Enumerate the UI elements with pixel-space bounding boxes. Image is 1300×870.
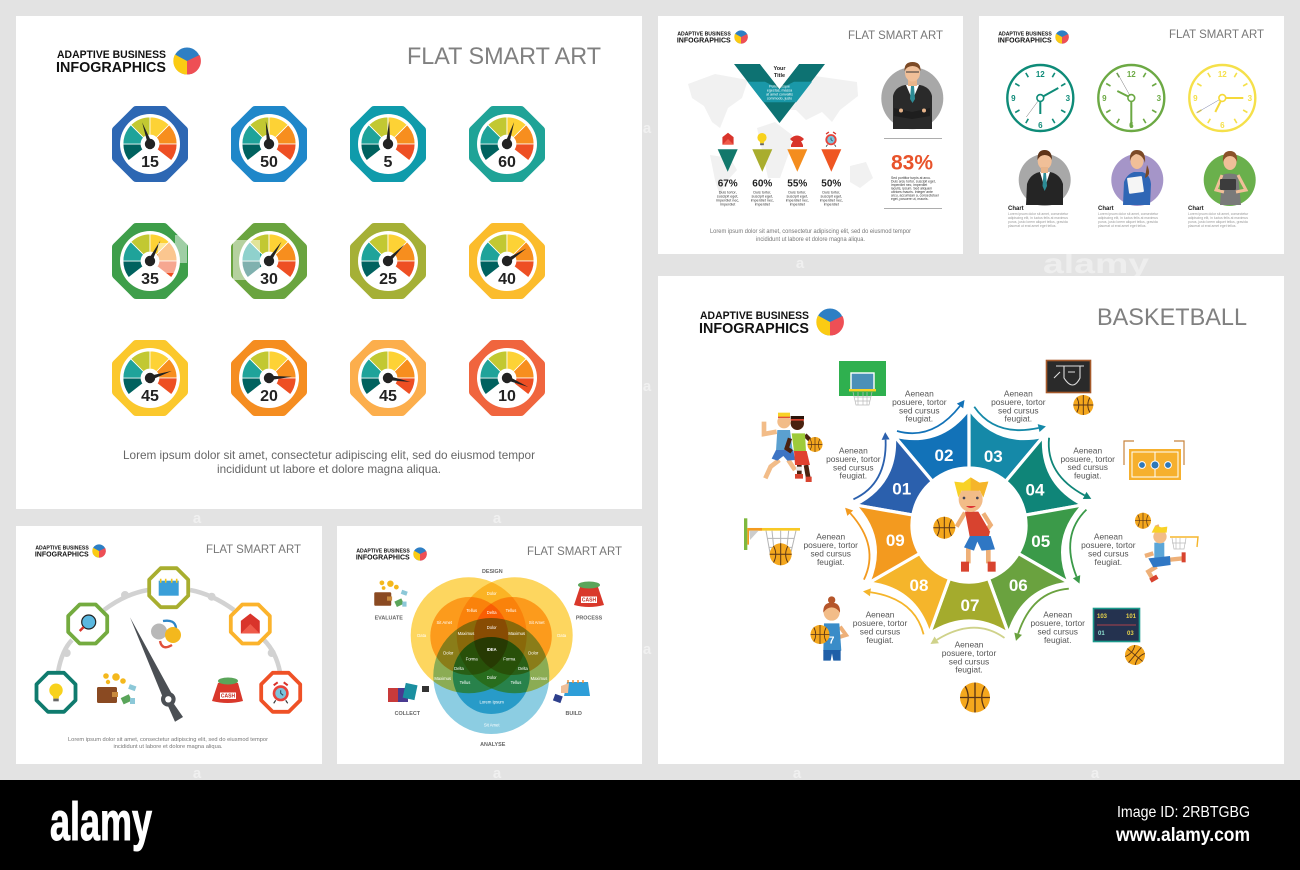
venn inner labels: IDEA bbox=[487, 647, 497, 652]
big percent description: imperdiet nec, imperdiet bbox=[891, 183, 927, 187]
segment numbers: 08 bbox=[910, 576, 928, 595]
footer image id: Image ID: 2RBTGBG bbox=[1117, 804, 1250, 821]
icon: cash bag bbox=[212, 678, 243, 703]
label 02: Aenean bbox=[905, 388, 934, 398]
label 03: posuere, tortor bbox=[991, 397, 1046, 407]
venn inner labels: Lorem Ipsum bbox=[479, 700, 504, 704]
ball in net bbox=[770, 543, 792, 565]
venn inner labels: Delta bbox=[454, 666, 465, 671]
centre ball bbox=[933, 517, 955, 539]
logo: percentages panel: ADAPTIVE BUSINESS bbox=[677, 32, 731, 38]
panel: percentages on world map bbox=[658, 16, 963, 254]
label 06: sed cursus bbox=[1037, 626, 1078, 636]
gauge 5: 5 bbox=[384, 154, 393, 171]
venn inner labels: Dolor bbox=[443, 650, 454, 656]
label 01: Aenean bbox=[839, 446, 868, 456]
icon: scoreboard: 103 bbox=[1097, 614, 1108, 620]
label 08: Aenean bbox=[866, 610, 895, 620]
logo: gauges panel: ADAPTIVE BUSINESS bbox=[57, 49, 166, 61]
icon: folders bbox=[388, 683, 429, 702]
label 05: posuere, tortor bbox=[1081, 540, 1136, 550]
icon: stopwatch bbox=[825, 132, 837, 147]
icon: court bbox=[1124, 441, 1184, 479]
chart text 1: placerat ut erat amet eget tellus. bbox=[1008, 224, 1056, 228]
watermark marks in gutters: a bbox=[493, 765, 502, 782]
watermark marks in gutters: a bbox=[193, 510, 202, 527]
logo: venn panel bbox=[356, 547, 427, 561]
node: alarm clock bbox=[261, 673, 300, 712]
clock green teal: 9 bbox=[1011, 94, 1016, 103]
player: girl with ball bbox=[823, 596, 846, 661]
icon: cash bag: CASH bbox=[221, 694, 235, 700]
icon: telephone bbox=[790, 136, 804, 147]
panel: basketball wheel bbox=[658, 276, 1284, 764]
label 04: Aenean bbox=[1073, 445, 1102, 455]
label 09 bbox=[803, 532, 858, 567]
segment numbers: 05 bbox=[1031, 532, 1050, 551]
panel: clocks bbox=[979, 16, 1284, 254]
divider top bbox=[884, 137, 942, 140]
logo: venn panel: ADAPTIVE BUSINESS bbox=[356, 549, 410, 555]
gauge 10 bbox=[473, 344, 541, 412]
icon: calendar and hand bbox=[553, 680, 590, 703]
venn inner labels: Data bbox=[557, 633, 567, 638]
watermark marks in gutters: a bbox=[193, 765, 202, 782]
logo: percentages panel: INFOGRAPHICS bbox=[677, 35, 731, 44]
big percent description bbox=[891, 176, 940, 201]
centre player bbox=[954, 477, 996, 572]
logo: arc panel: ADAPTIVE BUSINESS bbox=[35, 546, 89, 552]
player: jump shot bbox=[1145, 525, 1186, 583]
chart text 1 bbox=[1008, 206, 1069, 228]
label 07: feugiat. bbox=[955, 665, 983, 675]
label 01: feugiat. bbox=[840, 471, 867, 481]
chart text 3: purus, justo lorem aliquet tellus, gravida bbox=[1188, 220, 1248, 224]
label 05: Aenean bbox=[1094, 532, 1123, 542]
clock green teal bbox=[1007, 65, 1073, 131]
label 08: posuere, tortor bbox=[853, 618, 907, 628]
logo: clocks panel: ADAPTIVE BUSINESS bbox=[998, 32, 1052, 38]
title triangle: Your bbox=[773, 66, 786, 72]
percent descriptions: imperdiet nec, bbox=[786, 198, 809, 202]
chart text 3: Chart bbox=[1188, 206, 1204, 212]
panel: arc with needle bbox=[16, 526, 322, 764]
chart text 2: Lorem ipsum dolor sit amet, consectetur bbox=[1098, 212, 1159, 216]
venn inner labels: Sit Amet bbox=[484, 722, 500, 728]
label 09: posuere, tortor bbox=[803, 540, 858, 550]
big percent description: arcu, accumsan a, consectetuer bbox=[891, 194, 940, 198]
segment numbers bbox=[886, 446, 1050, 615]
label 03: feugiat. bbox=[1005, 414, 1032, 424]
venn outer labels: PROCESS bbox=[576, 616, 603, 622]
ball under label 07 bbox=[960, 682, 990, 712]
gray arc bbox=[58, 590, 280, 672]
panel: gauges bbox=[16, 16, 642, 509]
watermark in gutter: alamy bbox=[1043, 248, 1150, 279]
watermark marks in gutters: a bbox=[1091, 765, 1100, 782]
gauge 50 bbox=[235, 110, 303, 178]
chart text 2 bbox=[1098, 206, 1159, 228]
logo: clocks panel: INFOGRAPHICS bbox=[998, 35, 1052, 44]
gauge 40 bbox=[473, 227, 541, 295]
logo: basketball panel bbox=[699, 308, 844, 337]
clock yellow: 9 bbox=[1193, 94, 1198, 103]
caption: percentages panel bbox=[710, 228, 911, 243]
venn inner labels: Forma bbox=[466, 656, 478, 662]
arrows bbox=[833, 383, 1113, 667]
venn inner labels: Delta bbox=[487, 610, 497, 615]
gauge 30 bbox=[235, 227, 303, 295]
segments bbox=[837, 388, 1107, 660]
triangle 67 bbox=[718, 149, 738, 172]
gauge 20 bbox=[235, 344, 303, 412]
caption: gauges panel: incididunt ut labore et dolore magna aliqua. bbox=[217, 462, 441, 476]
label 01 bbox=[826, 446, 881, 481]
venn outer labels: EVALUATE bbox=[375, 616, 403, 622]
big percent description: Duis arcu tortor, suscipit eget, bbox=[891, 180, 936, 184]
percent descriptions: suscipit eget, bbox=[717, 194, 738, 198]
label 04 bbox=[1060, 445, 1115, 480]
node: magnifier bbox=[68, 604, 107, 644]
watermark marks in gutters bbox=[193, 120, 1100, 782]
percent descriptions: imperdiet bbox=[790, 202, 805, 206]
gauge 30: 30 bbox=[260, 271, 278, 288]
clock yellow: 12 bbox=[1218, 70, 1227, 79]
logo: gauges panel bbox=[56, 48, 201, 76]
label 01: posuere, tortor bbox=[826, 454, 881, 464]
label 03: sed cursus bbox=[998, 405, 1039, 415]
big percent: 83% bbox=[891, 152, 933, 174]
venn outer labels: DESIGN bbox=[482, 569, 503, 575]
needle bbox=[130, 617, 183, 722]
ball: defenders bbox=[808, 437, 822, 452]
label 04: sed cursus bbox=[1067, 462, 1108, 472]
clock yellow bbox=[1189, 65, 1255, 131]
portrait: businessman bbox=[881, 62, 943, 129]
venn inner labels: Maximus bbox=[458, 631, 474, 636]
venn inner labels: Tellus bbox=[506, 608, 516, 613]
chart text 2: Chart bbox=[1098, 206, 1114, 212]
chart text 3: adipiscing elit, in luctus felis at maximus bbox=[1188, 216, 1248, 220]
big percent description: iaculis, ipsum. Sed aliquam bbox=[891, 186, 932, 190]
label 08: sed cursus bbox=[860, 626, 900, 636]
label 04: feugiat. bbox=[1074, 470, 1101, 480]
portrait: man bbox=[1019, 150, 1071, 206]
clock green: 9 bbox=[1102, 94, 1107, 103]
heading: arc panel: FLAT SMART ART bbox=[206, 542, 302, 556]
clock green: 12 bbox=[1127, 70, 1136, 79]
venn outer labels: ANALYSE bbox=[480, 742, 506, 748]
big percent description: eget, posuere ut, mauris. bbox=[891, 197, 929, 201]
clock yellow: 6 bbox=[1220, 121, 1225, 130]
heading: clocks panel: FLAT SMART ART bbox=[1169, 27, 1265, 41]
footer band bbox=[0, 780, 1300, 870]
venn outer labels: COLLECT bbox=[395, 711, 421, 717]
logo: basketball panel: INFOGRAPHICS bbox=[699, 320, 809, 337]
wheel bbox=[833, 383, 1113, 667]
caption: gauges panel: Lorem ipsum dolor sit amet, consectetur adipiscing elit, sed do eiusmod tempor bbox=[123, 448, 535, 462]
chart text 1: Chart bbox=[1008, 206, 1024, 212]
big percent description: Sed porttitor turpis at arcu. bbox=[891, 176, 931, 180]
venn inner labels: Dolor bbox=[487, 625, 497, 630]
title triangle: egestas, massa bbox=[767, 88, 792, 92]
icon: chalkboard bbox=[1046, 360, 1090, 392]
panel: venn diagram bbox=[337, 526, 642, 764]
venn inner labels: Sit Amet bbox=[437, 620, 453, 625]
watermark marks in gutters: a bbox=[643, 641, 652, 658]
percent values: 55% bbox=[787, 178, 807, 190]
label 07: Aenean bbox=[955, 640, 984, 650]
ball: jump shot bbox=[1135, 513, 1151, 529]
title triangle: at amet convallis bbox=[766, 93, 793, 97]
heading: venn panel: FLAT SMART ART bbox=[527, 544, 623, 558]
gauge 25: 25 bbox=[379, 271, 397, 288]
gauge 25 bbox=[354, 227, 422, 295]
label 02: sed cursus bbox=[899, 405, 940, 415]
percent values bbox=[718, 178, 841, 190]
icon: wallet bbox=[374, 580, 408, 607]
watermark marks in gutters: a bbox=[643, 378, 652, 395]
logo: arc panel bbox=[35, 544, 106, 558]
venn inner labels bbox=[417, 591, 567, 728]
percent descriptions: imperdiet bbox=[720, 202, 735, 206]
node: bulb bbox=[36, 673, 76, 712]
percent descriptions: Duis tortor, bbox=[788, 190, 806, 194]
caption: gauges panel bbox=[123, 448, 535, 476]
logo: venn panel: INFOGRAPHICS bbox=[356, 552, 410, 561]
watermark marks in gutters: a bbox=[643, 120, 652, 137]
label 05 bbox=[1081, 532, 1136, 567]
venn inner labels: Tellus bbox=[466, 608, 477, 613]
venn inner labels: Dolor bbox=[528, 650, 539, 656]
portrait: woman with papers bbox=[1111, 150, 1163, 206]
chart text 3: Lorem ipsum dolor sit amet, consectetur bbox=[1188, 212, 1249, 216]
chart text 1: purus, justo lorem aliquet tellus, gravida bbox=[1008, 220, 1068, 224]
percent descriptions: imperdiet nec, bbox=[751, 198, 774, 202]
label 05: feugiat. bbox=[1095, 557, 1122, 567]
label 03: Aenean bbox=[1004, 388, 1033, 398]
triangle 50 bbox=[821, 149, 841, 172]
icon: scoreboard: 01 bbox=[1098, 631, 1105, 637]
caption: arc panel: Lorem ipsum dolor sit amet, consectetur adipiscing elit, sed do eiusmod tempor bbox=[68, 737, 268, 743]
ball under chalkboard bbox=[1073, 395, 1093, 415]
heading: basketball panel: BASKETBALL bbox=[1097, 304, 1247, 331]
label 06: Aenean bbox=[1043, 610, 1072, 620]
chart text 1: adipiscing elit, in luctus felis at maximus bbox=[1008, 216, 1068, 220]
gauge 10: 10 bbox=[498, 388, 516, 405]
icon: bulb bbox=[757, 133, 767, 145]
triangle 60 bbox=[752, 149, 772, 172]
segment numbers: 04 bbox=[1026, 480, 1045, 499]
gauge 50: 50 bbox=[260, 154, 278, 171]
logo: clocks panel bbox=[998, 30, 1069, 44]
player: girl with ball: 7 bbox=[829, 635, 835, 646]
gauge 35: 35 bbox=[141, 271, 159, 288]
title triangle: Title bbox=[774, 73, 785, 79]
icon: envelope bbox=[722, 133, 734, 145]
venn inner labels: Dolor bbox=[487, 675, 497, 680]
percent values: 67% bbox=[718, 178, 738, 190]
label 06: feugiat. bbox=[1044, 635, 1071, 645]
label 05: sed cursus bbox=[1088, 548, 1129, 558]
gauge 45 second: 45 bbox=[379, 388, 397, 405]
label 06: posuere, tortor bbox=[1030, 618, 1085, 628]
percent descriptions: suscipit eget, bbox=[787, 194, 808, 198]
node: calendar bbox=[149, 568, 188, 607]
venn outer labels: BUILD bbox=[565, 711, 582, 717]
ball: girl bbox=[810, 625, 830, 644]
venn inner labels: Delta bbox=[518, 666, 529, 671]
chart text 1: Lorem ipsum dolor sit amet, consectetur bbox=[1008, 212, 1069, 216]
segment numbers: 01 bbox=[892, 480, 911, 499]
caption: percentages panel: Lorem ipsum dolor sit amet, consectetur adipiscing elit, sed do eiusmod tempor bbox=[710, 228, 911, 235]
gauge 35 bbox=[116, 227, 184, 295]
gauge 45 bbox=[116, 344, 184, 412]
segment numbers: 09 bbox=[886, 531, 905, 550]
icon: small hoop bbox=[1170, 537, 1198, 549]
icon: cash bag bbox=[574, 582, 604, 607]
segment numbers: 03 bbox=[984, 447, 1003, 466]
label 03 bbox=[991, 388, 1046, 424]
caption: percentages panel: incididunt ut labore et dolore magna aliqua. bbox=[756, 236, 865, 243]
clock green teal: 6 bbox=[1038, 121, 1043, 130]
segment numbers: 07 bbox=[961, 596, 979, 615]
ball under scoreboard bbox=[1121, 641, 1149, 669]
label 09: feugiat. bbox=[817, 557, 844, 567]
icon: scoreboard bbox=[1094, 608, 1140, 642]
heading: gauges panel: FLAT SMART ART bbox=[407, 43, 601, 70]
percent descriptions: suscipit eget, bbox=[752, 194, 773, 198]
chart text 2: adipiscing elit, in luctus felis at maximus bbox=[1098, 216, 1158, 220]
gauge 45 second bbox=[354, 344, 422, 412]
gauge 5 bbox=[354, 110, 422, 178]
icon: wallet bbox=[97, 673, 136, 704]
venn inner labels: Forma bbox=[503, 656, 516, 662]
watermark overlay on gauges bbox=[158, 235, 260, 280]
heading: percentages panel: FLAT SMART ART bbox=[848, 28, 944, 42]
icon: backboard bbox=[839, 361, 886, 405]
node: envelope bbox=[231, 604, 270, 644]
footer logo: alamy bbox=[50, 792, 152, 852]
divider bottom bbox=[884, 207, 942, 210]
percent descriptions: Duis tortor, bbox=[753, 190, 771, 194]
world map bbox=[688, 74, 873, 196]
players: two defenders bbox=[764, 413, 815, 482]
title triangle: Pellentesque bbox=[769, 84, 790, 88]
clock green: 6 bbox=[1129, 121, 1134, 130]
caption: arc panel: incididunt ut labore et dolore magna aliqua. bbox=[114, 744, 222, 750]
clock yellow: 3 bbox=[1248, 94, 1253, 103]
clock green teal: 3 bbox=[1066, 94, 1071, 103]
logo: arc panel: INFOGRAPHICS bbox=[35, 549, 89, 558]
title triangle bbox=[734, 64, 825, 123]
icon: cash bag: CASH bbox=[582, 598, 596, 604]
segment numbers: 06 bbox=[1009, 576, 1028, 595]
gauge 15 bbox=[116, 110, 184, 178]
clock green bbox=[1098, 65, 1164, 131]
label 02 bbox=[892, 388, 947, 424]
gauge 20: 20 bbox=[260, 388, 278, 405]
percent descriptions: imperdiet nec, bbox=[820, 198, 843, 202]
venn circles bbox=[411, 577, 573, 734]
title triangle: commodo, justo bbox=[767, 96, 792, 100]
portrait: woman with tablet bbox=[1204, 151, 1256, 206]
label 07 bbox=[942, 640, 996, 675]
percent descriptions: suscipit eget, bbox=[821, 194, 842, 198]
venn inner labels: Maximus bbox=[531, 676, 547, 681]
percent descriptions: imperdiet bbox=[824, 202, 839, 206]
logo: gauges panel: INFOGRAPHICS bbox=[56, 59, 166, 76]
label 08 bbox=[853, 610, 907, 645]
icon: scoreboard: 101 bbox=[1126, 614, 1137, 620]
label 08: feugiat. bbox=[866, 635, 894, 645]
venn inner labels: Sit Amet bbox=[529, 620, 545, 625]
label 09: Aenean bbox=[816, 532, 845, 542]
venn outer labels bbox=[375, 569, 603, 748]
clock green teal: 12 bbox=[1036, 70, 1045, 79]
segment numbers: 02 bbox=[935, 446, 953, 465]
venn inner labels: Data bbox=[417, 633, 427, 638]
hoop and net bbox=[744, 518, 800, 557]
percent descriptions: imperdiet nec, bbox=[716, 198, 739, 202]
label 02: posuere, tortor bbox=[892, 397, 947, 407]
venn inner labels: Maximus bbox=[434, 676, 451, 681]
label 09: sed cursus bbox=[810, 548, 851, 558]
watermark marks in gutters: a bbox=[493, 510, 502, 527]
percent descriptions: imperdiet bbox=[755, 202, 770, 206]
chart text 2: purus, justo lorem aliquet tellus, gravida bbox=[1098, 220, 1158, 224]
icon: coins bbox=[151, 621, 181, 647]
clock green: 3 bbox=[1157, 94, 1162, 103]
gauge 60: 60 bbox=[498, 154, 516, 171]
triangle 55 bbox=[787, 149, 807, 172]
percent descriptions: Duis tortor, bbox=[822, 190, 840, 194]
label 06 bbox=[1030, 610, 1085, 645]
logo: basketball panel: ADAPTIVE BUSINESS bbox=[700, 310, 809, 322]
footer url: www.alamy.com bbox=[1115, 825, 1250, 846]
gauge 45: 45 bbox=[141, 388, 159, 405]
label 02: feugiat. bbox=[906, 414, 933, 424]
gauge 40: 40 bbox=[498, 271, 516, 288]
percent values: 50% bbox=[821, 178, 841, 190]
label 07: sed cursus bbox=[949, 656, 989, 666]
watermark marks in gutters: a bbox=[793, 765, 802, 782]
venn inner labels: Dolor bbox=[487, 591, 497, 596]
big percent description: ultrices mauris. Integer ante bbox=[891, 190, 933, 194]
percent descriptions bbox=[716, 190, 843, 206]
icon: scoreboard: 03 bbox=[1127, 631, 1134, 637]
gauge 15: 15 bbox=[141, 154, 159, 171]
gauge 60 bbox=[473, 110, 541, 178]
percent values: 60% bbox=[752, 178, 772, 190]
caption: arc panel bbox=[68, 737, 268, 750]
venn inner labels: Tellus bbox=[460, 680, 470, 685]
venn inner labels: Tellus bbox=[511, 680, 521, 685]
chart text 2: placerat ut erat amet eget tellus. bbox=[1098, 224, 1146, 228]
label 07: posuere, tortor bbox=[942, 648, 996, 658]
label 04: posuere, tortor bbox=[1060, 454, 1115, 464]
venn inner labels: Maximus bbox=[508, 631, 525, 636]
watermark marks in gutters: a bbox=[796, 255, 805, 272]
chart text 3: placerat ut erat amet eget tellus. bbox=[1188, 224, 1236, 228]
logo: percentages panel bbox=[677, 30, 748, 44]
label 01: sed cursus bbox=[833, 462, 874, 472]
percent descriptions: Duis tortor, bbox=[719, 190, 737, 194]
chart text 3 bbox=[1188, 206, 1249, 228]
